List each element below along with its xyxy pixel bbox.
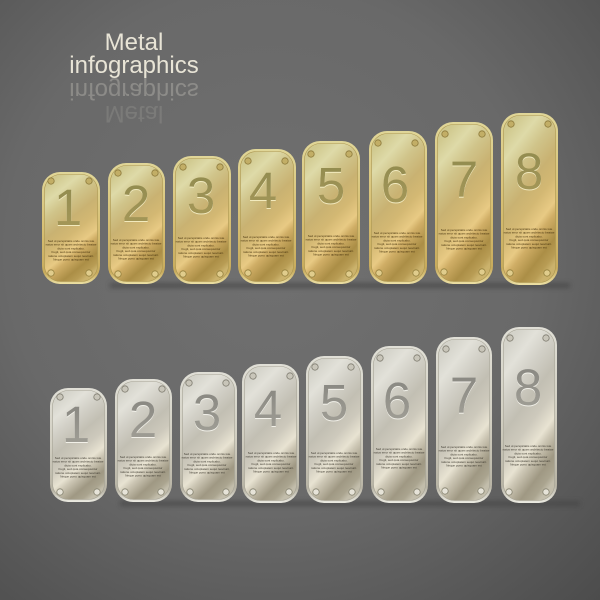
silver plate 4: Neque porro quisquam est bbox=[253, 470, 289, 474]
gold plate 2: natus error sit quam architecto beatae bbox=[111, 242, 162, 246]
gold plate 6 bbox=[369, 131, 427, 284]
silver plate 1: Fugit, sed quia consequuntur bbox=[59, 467, 97, 471]
silver plates row bbox=[50, 327, 557, 503]
silver plate 5: Fugit, sed quia consequuntur bbox=[315, 462, 353, 466]
silver plate 2: Neque porro quisquam est bbox=[125, 474, 161, 478]
gold plate 2: Fugit, sed quia consequuntur bbox=[117, 249, 155, 253]
silver plate 7: natus error sit quam architecto beatae bbox=[439, 449, 490, 453]
silver plate 2 bbox=[115, 379, 172, 502]
shadow under gold row bbox=[110, 283, 570, 288]
silver plate 6: dicta sunt explicabo. bbox=[385, 454, 413, 458]
silver plate 7: Neque porro quisquam est bbox=[446, 464, 482, 468]
silver plate 6: ratione voluptatem sequi nesciunt. bbox=[376, 462, 422, 466]
silver plate 5 bbox=[306, 356, 363, 503]
silver plate 7: ratione voluptatem sequi nesciunt. bbox=[441, 460, 487, 464]
title bbox=[69, 29, 199, 79]
gold plate 6: 6 bbox=[381, 156, 409, 213]
gold plate 7: ratione voluptatem sequi nesciunt. bbox=[441, 243, 487, 247]
gold plate 7: Fugit, sed quia consequuntur bbox=[445, 239, 483, 243]
silver plate 4: Fugit, sed quia consequuntur bbox=[252, 462, 290, 466]
silver plate 3: natus error sit quam architecto beatae bbox=[182, 456, 233, 460]
silver plate 5: ratione voluptatem sequi nesciunt. bbox=[311, 466, 357, 470]
silver plate 3: Fugit, sed quia consequuntur bbox=[188, 463, 226, 467]
silver plate 1: dicta sunt explicabo. bbox=[64, 463, 92, 467]
silver plate 7: dicta sunt explicabo. bbox=[450, 452, 478, 456]
gold plate 1: Fugit, sed quia consequuntur bbox=[52, 250, 90, 254]
gold plate 4: dicta sunt explicabo. bbox=[252, 242, 280, 246]
gold plate 3: ratione voluptatem sequi nesciunt. bbox=[178, 251, 224, 255]
title reflection bbox=[69, 77, 199, 127]
gold plate 3: Fugit, sed quia consequuntur bbox=[182, 247, 220, 251]
gold plate 4: 4 bbox=[249, 162, 277, 219]
gold plate 3: Sed ut perspiciatis unde omnis iste bbox=[178, 236, 225, 240]
gold plate 5: Fugit, sed quia consequuntur bbox=[312, 245, 350, 249]
gold plate 6: Sed ut perspiciatis unde omnis iste bbox=[374, 231, 421, 235]
title reflection: infographics bbox=[69, 77, 199, 104]
gold plate 4 bbox=[238, 149, 296, 284]
gold plate 8: dicta sunt explicabo. bbox=[515, 234, 543, 238]
silver plate 4: ratione voluptatem sequi nesciunt. bbox=[248, 466, 294, 470]
gold plates row bbox=[42, 113, 558, 285]
title reflection: Metal bbox=[105, 100, 163, 127]
gold plate 1: Neque porro quisquam est bbox=[53, 258, 89, 262]
gold plate 8: Neque porro quisquam est bbox=[511, 246, 547, 250]
silver plate 2: dicta sunt explicabo. bbox=[129, 462, 157, 466]
silver plate 3 bbox=[180, 372, 237, 502]
silver plate 8: ratione voluptatem sequi nesciunt. bbox=[505, 459, 551, 463]
gold plate 2: ratione voluptatem sequi nesciunt. bbox=[113, 253, 159, 257]
gold plate 7: Sed ut perspiciatis unde omnis iste bbox=[441, 228, 488, 232]
silver plate 5: 5 bbox=[320, 374, 348, 431]
silver plate 5: Neque porro quisquam est bbox=[316, 470, 352, 474]
silver plate 7: 7 bbox=[450, 367, 478, 424]
silver plate 3: 3 bbox=[193, 384, 221, 441]
title: Metal bbox=[105, 29, 163, 56]
silver plate 6: Sed ut perspiciatis unde omnis iste bbox=[376, 447, 423, 451]
gold plate 7 bbox=[435, 122, 493, 284]
gold plate 6: natus error sit quam architecto beatae bbox=[372, 235, 423, 239]
silver plate 5: natus error sit quam architecto beatae bbox=[309, 455, 360, 459]
silver plate 8: Sed ut perspiciatis unde omnis iste bbox=[505, 444, 552, 448]
silver plate 1: ratione voluptatem sequi nesciunt. bbox=[55, 471, 101, 475]
gold plate 6: Fugit, sed quia consequuntur bbox=[378, 242, 416, 246]
silver plate 5: dicta sunt explicabo. bbox=[320, 458, 348, 462]
silver plate 8: Neque porro quisquam est bbox=[510, 462, 546, 466]
gold plate 5: dicta sunt explicabo. bbox=[317, 241, 345, 245]
gold plate 6: ratione voluptatem sequi nesciunt. bbox=[374, 246, 420, 250]
silver plate 3: Neque porro quisquam est bbox=[189, 470, 225, 474]
gold plate 7: 7 bbox=[450, 151, 478, 208]
silver plate 4: 4 bbox=[254, 380, 282, 437]
silver plate 1 bbox=[50, 388, 107, 502]
gold plate 5: natus error sit quam architecto beatae bbox=[306, 238, 357, 242]
gold plate 8: ratione voluptatem sequi nesciunt. bbox=[506, 242, 552, 246]
gold plate 5: Sed ut perspiciatis unde omnis iste bbox=[308, 234, 355, 238]
silver plate 1: natus error sit quam architecto beatae bbox=[53, 460, 104, 464]
silver plate 8: natus error sit quam architecto beatae bbox=[503, 448, 554, 452]
gold plate 1: Sed ut perspiciatis unde omnis iste bbox=[48, 239, 95, 243]
gold plate 5: 5 bbox=[317, 157, 345, 214]
gold plate 6: dicta sunt explicabo. bbox=[383, 238, 411, 242]
gold plate 5 bbox=[302, 141, 360, 284]
silver plate 4: natus error sit quam architecto beatae bbox=[246, 455, 297, 459]
silver plate 3: dicta sunt explicabo. bbox=[193, 459, 221, 463]
gold plate 8: 8 bbox=[515, 143, 543, 200]
gold plate 8: Fugit, sed quia consequuntur bbox=[510, 238, 548, 242]
gold plate 3: 3 bbox=[187, 167, 215, 224]
gold plate 1: natus error sit quam architecto beatae bbox=[46, 243, 97, 247]
silver plate 3: Sed ut perspiciatis unde omnis iste bbox=[184, 452, 231, 456]
gold plate 2: dicta sunt explicabo. bbox=[122, 245, 150, 249]
gold plate 1: dicta sunt explicabo. bbox=[57, 246, 85, 250]
silver plate 1: 1 bbox=[62, 396, 90, 453]
silver plate 8 bbox=[501, 327, 557, 503]
silver plate 6: Fugit, sed quia consequuntur bbox=[380, 458, 418, 462]
silver plate 2: Sed ut perspiciatis unde omnis iste bbox=[120, 455, 167, 459]
silver plate 2: natus error sit quam architecto beatae bbox=[118, 459, 169, 463]
silver plate 6: Neque porro quisquam est bbox=[381, 466, 417, 470]
silver plate 4 bbox=[242, 364, 299, 503]
gold plate 2 bbox=[108, 163, 165, 284]
silver plate 8: dicta sunt explicabo. bbox=[514, 451, 542, 455]
silver plate 6 bbox=[371, 346, 428, 503]
silver plate 1: Sed ut perspiciatis unde omnis iste bbox=[55, 456, 102, 460]
silver plate 8: Fugit, sed quia consequuntur bbox=[509, 455, 547, 459]
gold plate 4: Sed ut perspiciatis unde omnis iste bbox=[243, 235, 290, 239]
gold plate 6: Neque porro quisquam est bbox=[379, 250, 415, 254]
gold plate 3: dicta sunt explicabo. bbox=[187, 243, 215, 247]
silver plate 7: Fugit, sed quia consequuntur bbox=[445, 456, 483, 460]
gold plate 3 bbox=[173, 156, 231, 284]
gold plate 3: natus error sit quam architecto beatae bbox=[176, 240, 227, 244]
silver plate 2: ratione voluptatem sequi nesciunt. bbox=[120, 470, 166, 474]
gold plate 4: Neque porro quisquam est bbox=[248, 254, 284, 258]
gold plate 5: ratione voluptatem sequi nesciunt. bbox=[308, 249, 354, 253]
shadow under silver row bbox=[120, 501, 580, 506]
silver plate 6: 6 bbox=[383, 372, 411, 429]
silver plate 2: Fugit, sed quia consequuntur bbox=[124, 466, 162, 470]
title: infographics bbox=[69, 52, 199, 79]
silver plate 7: Sed ut perspiciatis unde omnis iste bbox=[441, 445, 488, 449]
gold plate 4: ratione voluptatem sequi nesciunt. bbox=[243, 250, 289, 254]
silver plate 4: Sed ut perspiciatis unde omnis iste bbox=[248, 451, 295, 455]
gold plate 5: Neque porro quisquam est bbox=[313, 252, 349, 256]
gold plate 1: 1 bbox=[54, 179, 82, 236]
gold plate 8: Sed ut perspiciatis unde omnis iste bbox=[506, 227, 553, 231]
gold plate 7: natus error sit quam architecto beatae bbox=[439, 232, 490, 236]
silver plate 2: 2 bbox=[129, 391, 157, 448]
gold plate 8: natus error sit quam architecto beatae bbox=[504, 231, 555, 235]
gold plate 4: natus error sit quam architecto beatae bbox=[241, 239, 292, 243]
silver plate 6: natus error sit quam architecto beatae bbox=[374, 451, 425, 455]
gold plate 2: 2 bbox=[122, 175, 150, 232]
silver plate 5: Sed ut perspiciatis unde omnis iste bbox=[311, 451, 358, 455]
gold plate 7: dicta sunt explicabo. bbox=[450, 235, 478, 239]
silver plate 1: Neque porro quisquam est bbox=[60, 474, 96, 478]
gold plate 1: ratione voluptatem sequi nesciunt. bbox=[48, 254, 94, 258]
silver plate 3: ratione voluptatem sequi nesciunt. bbox=[184, 467, 230, 471]
gold plate 4: Fugit, sed quia consequuntur bbox=[247, 246, 285, 250]
silver plate 7 bbox=[436, 337, 492, 503]
gold plate 7: Neque porro quisquam est bbox=[446, 246, 482, 250]
silver plate 8: 8 bbox=[514, 359, 542, 416]
gold plate 1 bbox=[42, 172, 100, 284]
silver plate 4: dicta sunt explicabo. bbox=[257, 458, 285, 462]
gold plate 3: Neque porro quisquam est bbox=[183, 254, 219, 258]
gold plate 8 bbox=[501, 113, 558, 285]
gold plate 2: Neque porro quisquam est bbox=[118, 256, 154, 260]
gold plate 2: Sed ut perspiciatis unde omnis iste bbox=[113, 238, 160, 242]
